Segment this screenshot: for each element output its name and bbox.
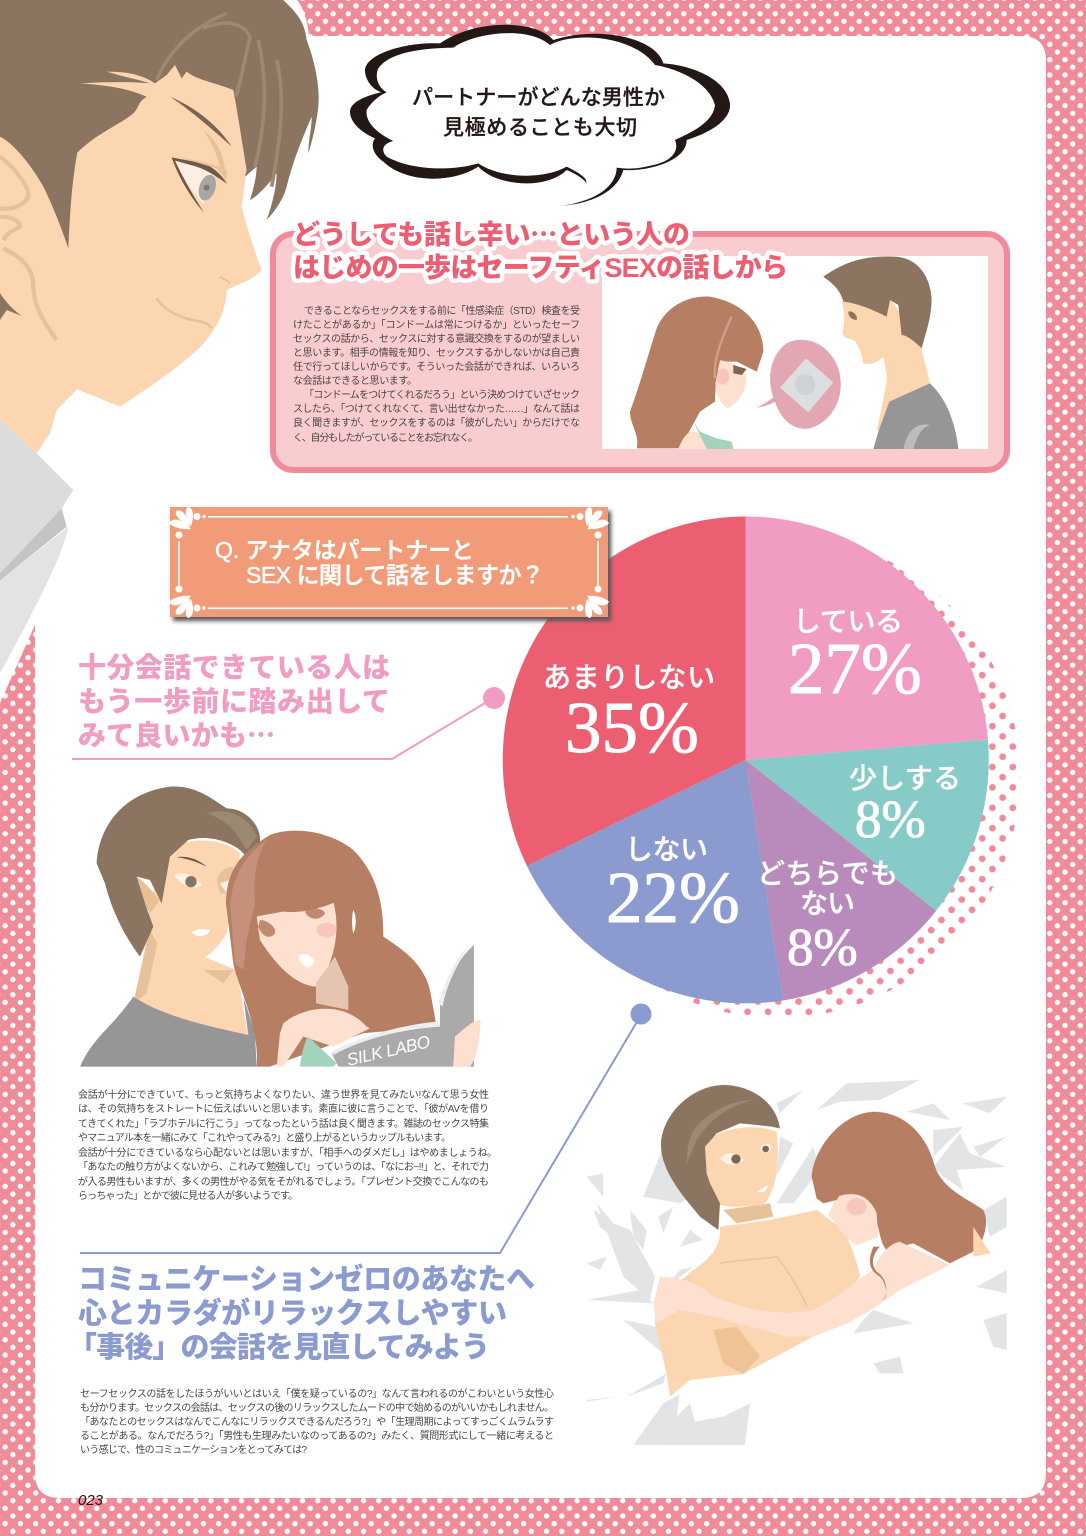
panel body text: けたことがあるか」「コンドームは常につけるか」といったセーフ bbox=[293, 318, 580, 331]
woman hair bbox=[226, 831, 437, 1067]
bubble with condom bbox=[757, 340, 841, 429]
label: 少しする: 8% bbox=[855, 791, 926, 849]
question text: SEX に関して話をしますか？ bbox=[246, 562, 544, 588]
woman face bbox=[828, 1194, 878, 1245]
body text: middle: やマニュアル本を一緒にみて「これやってみる?」と盛り上がるというカップルもいます。 bbox=[78, 1131, 451, 1144]
cloud outline bbox=[350, 25, 730, 206]
man neck and chest bbox=[133, 923, 248, 1037]
sheets bbox=[587, 1080, 1007, 1445]
woman face and neck bbox=[257, 902, 336, 987]
illustration: couple reading magazine bbox=[80, 787, 481, 1070]
panel body text: セックスの話から、セックスに対する意識交換をするのが望ましい bbox=[293, 332, 580, 345]
slice: 少しする 8% bbox=[746, 740, 989, 911]
heading: pink callout: みて良いかも… bbox=[78, 714, 275, 754]
eye and eyebrow bbox=[170, 97, 232, 213]
label: どちらでもない bbox=[757, 858, 898, 977]
callout: blue leader line bbox=[80, 1004, 652, 1253]
man hair bbox=[97, 787, 260, 957]
panel frame bbox=[273, 234, 1007, 470]
box body bbox=[170, 507, 608, 617]
pie chart dotted shadow bbox=[536, 534, 1020, 1018]
pie chart bbox=[503, 516, 989, 1003]
body text: bottom: も分かります。セックスの会話は、セックスの後のリラックスしたムードの中で始めるのがいいかもしれません。 bbox=[80, 1401, 554, 1414]
slice: している 27% bbox=[746, 516, 988, 760]
panel body text: 「コンドームをつけてくれるだろう」という決めつけていざセック bbox=[304, 388, 580, 401]
label: あまりしない: あまりしない bbox=[543, 662, 715, 693]
slice: どちらでもない 8% bbox=[746, 760, 936, 1000]
magazine title: SILK LABO bbox=[345, 1031, 432, 1070]
man face bbox=[149, 840, 240, 958]
camisole bbox=[300, 1037, 337, 1067]
panel body text: と思います。相手の情報を知り、セックスするかしないかは自己責 bbox=[293, 346, 580, 359]
face and neck bbox=[0, 50, 262, 453]
panel: safe sex talk bbox=[273, 213, 1007, 470]
heading outline: どうしても話し辛い…という人の bbox=[293, 213, 690, 252]
man shirt bbox=[873, 383, 958, 449]
speech bubble heading bbox=[350, 25, 730, 206]
callout: pink leader line bbox=[72, 687, 505, 759]
heading: blue callout: 心とカラダがリラックスしやすい bbox=[78, 1296, 507, 1330]
body text: bottom: いう感じで、性のコミュニケーションをとってみては? bbox=[80, 1443, 307, 1456]
label: あまりしない: 35% bbox=[565, 687, 699, 768]
hair bbox=[0, 0, 319, 248]
heading: blue callout: 「事後」の会話を見直してみよう bbox=[68, 1331, 490, 1364]
man skin bbox=[842, 298, 930, 432]
heading: blue callout: コミュニケーションゼロのあなたへ bbox=[78, 1262, 535, 1296]
man shirt bbox=[80, 997, 257, 1067]
label: しない: しない bbox=[625, 834, 708, 865]
page number: 023 bbox=[78, 1492, 104, 1509]
body text: middle: らっちゃった」とかで彼に見せる人が多いようです。 bbox=[78, 1189, 298, 1202]
panel body text: な会話はできると思います。 bbox=[293, 374, 417, 387]
slice: しない 22% bbox=[527, 760, 783, 1003]
illustration: couple with condom speech bubble bbox=[630, 256, 958, 449]
woman arm and shoulder bbox=[653, 1242, 950, 1337]
panel body text: できることならセックスをする前に「性感染症（STD）検査を受 bbox=[304, 304, 580, 317]
label: しない: 22% bbox=[606, 857, 740, 938]
blanket bbox=[673, 1256, 1007, 1445]
question text bbox=[215, 537, 544, 588]
box shadow bbox=[173, 511, 611, 621]
body text: middle: は、その気持ちをストレートに伝えばいいと思います。素直に彼に言うことで、「彼がAVを借り bbox=[78, 1102, 489, 1115]
heading fill bbox=[293, 213, 788, 283]
label: どちらでもない: どちらでも bbox=[757, 858, 898, 889]
panel body text: 任で行ってほしいからです。そういった会話ができれば、いろいろ bbox=[293, 360, 580, 373]
speech bubble heading: 見極めることも大切 bbox=[443, 116, 637, 140]
man hair bbox=[661, 1085, 780, 1230]
label: 少しする: 少しする bbox=[849, 763, 961, 794]
panel body text: く、自分もしたがっていることをお忘れなく。 bbox=[293, 431, 478, 444]
man hair bbox=[823, 256, 932, 348]
label: あまりしない bbox=[543, 662, 715, 768]
heading outline: はじめの一歩はセーフティSEXの話しから bbox=[293, 253, 788, 283]
question text: Q. アナタはパートナーと bbox=[215, 537, 474, 563]
heading: pink callout: 十分会話できている人は bbox=[78, 652, 390, 683]
panel body text bbox=[293, 304, 580, 444]
label: どちらでもない: 8% bbox=[787, 919, 858, 977]
panel heading bbox=[293, 213, 788, 283]
ornamental frame bbox=[169, 507, 609, 618]
man body bbox=[655, 1210, 860, 1397]
panel image background bbox=[602, 256, 988, 449]
cloud text: パートナーがどんな男性か bbox=[412, 86, 665, 110]
body text: middle: てきてくれた」「ラブホテルに行こう」ってなったという話は良く聞きます。雑誌のセックス特集 bbox=[78, 1117, 489, 1130]
label: どちらでもない: ない bbox=[800, 888, 855, 919]
woman hair bbox=[812, 1112, 986, 1263]
panel body text: スしたら、「つけてくれなくて、言い出せなかった……」なんて話は bbox=[293, 403, 580, 415]
heading outline bbox=[293, 213, 788, 283]
heading: pink callout bbox=[78, 652, 390, 754]
label: 少しする bbox=[849, 763, 961, 849]
heading: blue callout bbox=[68, 1262, 535, 1364]
body text: middle: 会話が十分にできているなら心配ないとは思いますが、「相手へのダメだし」はやめましょうね。 bbox=[78, 1146, 497, 1159]
magazine bbox=[332, 945, 474, 1070]
slice: あまりしない 35% bbox=[503, 516, 746, 866]
heading: pink callout: もう一歩前に踏み出して bbox=[78, 686, 390, 717]
question box bbox=[169, 507, 611, 621]
man face bbox=[702, 1127, 778, 1207]
heading fill: どうしても話し辛い…という人の bbox=[293, 213, 690, 252]
shirt collar bbox=[0, 420, 73, 673]
panel body text: 良く聞きますが、セックスをするのは「彼がしたい」からだけでな bbox=[293, 416, 580, 429]
body text: bottom bbox=[80, 1387, 554, 1456]
body text: bottom: セーフセックスの話をしたほうがいいとはいえ「僕を疑っているの?」なんて言われるのがこわいという女性心 bbox=[80, 1387, 554, 1400]
illustration: couple in bed bbox=[587, 1080, 1007, 1445]
body text: middle bbox=[78, 1088, 497, 1202]
body text: middle: が入る男性もいますが、多くの男性がやる気をそがれるでしょう。「プレゼント交換でこんなのも bbox=[78, 1175, 489, 1188]
illustration: large man profile bbox=[0, 0, 319, 673]
label: している: している bbox=[793, 606, 903, 637]
body text: middle: 会話が十分にできていて、もっと気持ちよくなりたい、違う世界を見てみたい!なんて思う女性 bbox=[78, 1088, 489, 1101]
body text: bottom: ることがある。なんでだろう?」「男性も生理みたいなのってあるの?」みたく、質問形式にして一緒に考えると bbox=[80, 1429, 554, 1442]
body text: middle: 「あなたの触り方がよくないから、これみて勉強して!」っていうのは、「なにお~!!」と、それで力 bbox=[78, 1160, 489, 1173]
heading fill: はじめの一歩はセーフティSEXの話しから bbox=[293, 253, 788, 283]
body text: bottom: 「あなたとのセックスはなんでこんなにリラックスできるんだろう?」や「生理周期によってすっごくムラムラす bbox=[80, 1415, 554, 1428]
label: している: 27% bbox=[788, 628, 922, 709]
